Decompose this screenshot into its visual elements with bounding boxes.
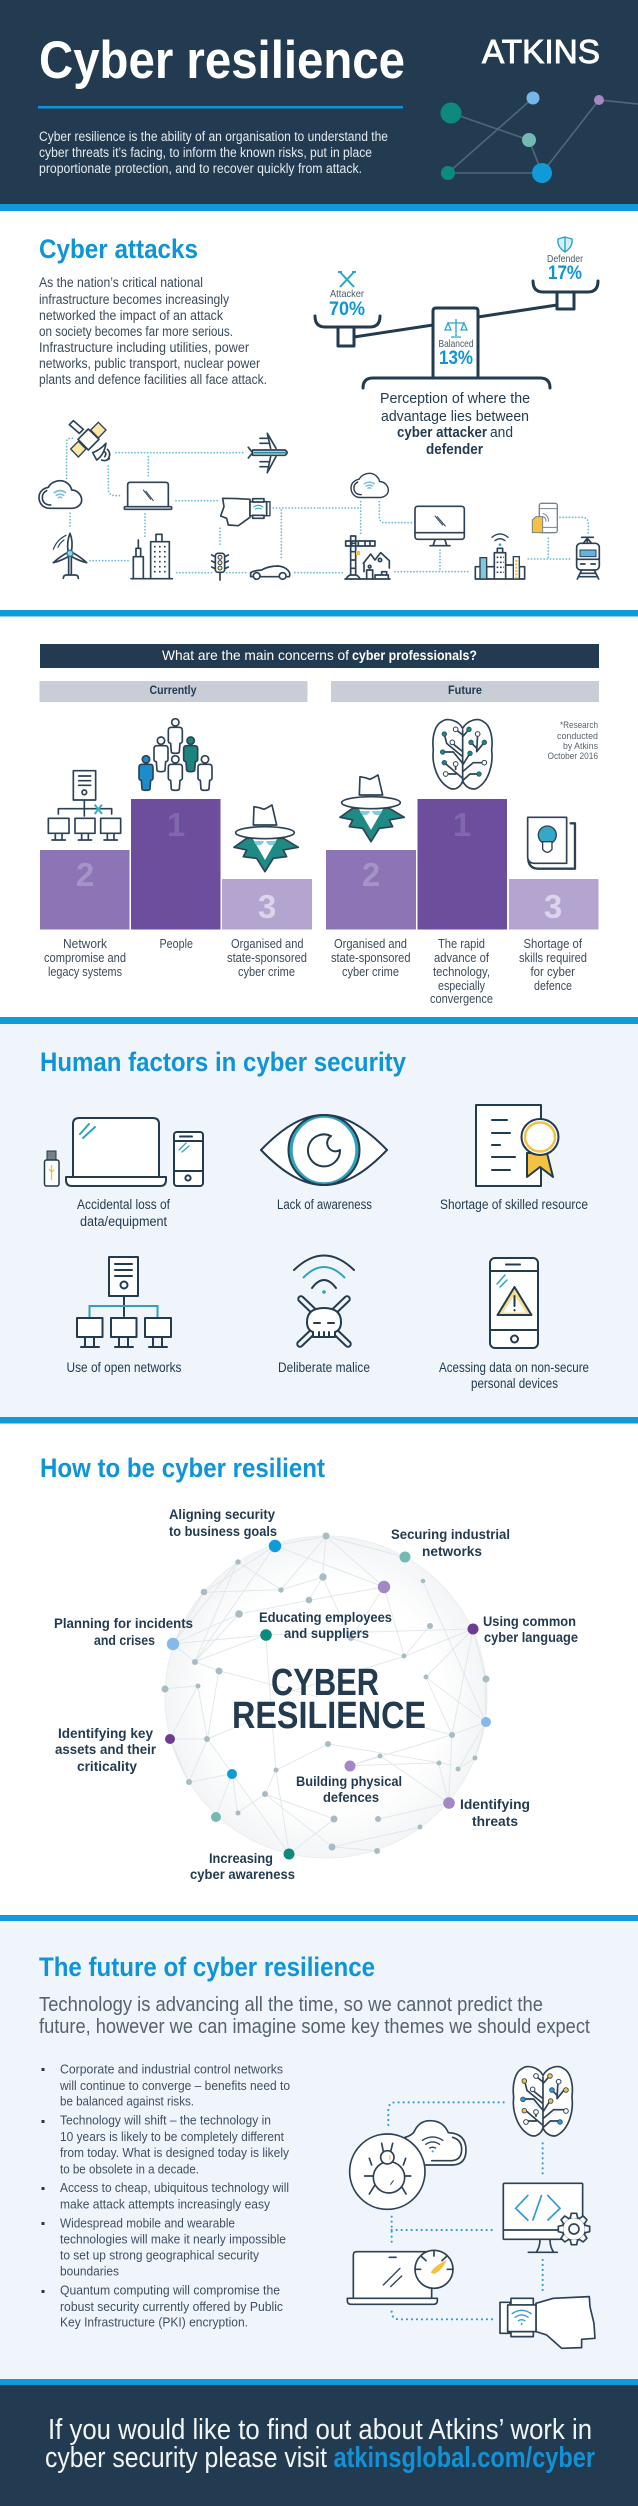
label xyxy=(439,1360,589,1391)
intro: future, however we can imagine some key themes we should expect xyxy=(39,2016,590,2038)
footer xyxy=(0,2379,638,2506)
bullet: shift: from today. What is designed today is likely xyxy=(60,2145,289,2160)
section divider band xyxy=(0,1417,638,1424)
icon: smartwatch on wrist xyxy=(500,2297,595,2348)
header panel xyxy=(0,0,638,211)
bar labels: future: state-sponsored xyxy=(331,951,411,965)
label: aligning security xyxy=(169,1507,277,1539)
label: securing industrial networks: Securing industrial xyxy=(391,1527,510,1542)
bullet: shift xyxy=(42,2113,289,2176)
value: balanced: 13% xyxy=(439,348,473,369)
label: common language: cyber language xyxy=(484,1630,578,1645)
body text: infrastructure becomes increasingly xyxy=(39,292,229,307)
heading: How to be cyber resilient xyxy=(40,1453,325,1483)
perception caption: and xyxy=(490,424,513,441)
label: Deliberate malice xyxy=(278,1360,370,1375)
icon: bug in circle xyxy=(350,2134,425,2209)
label: identifying threats xyxy=(460,1797,530,1829)
icon: usb, laptop, phone xyxy=(44,1118,203,1186)
label: educating employees: and suppliers xyxy=(284,1626,369,1641)
label: planning xyxy=(54,1616,193,1648)
body text: networks, public transport, nuclear power xyxy=(39,356,260,371)
label: common language: Using common xyxy=(483,1614,576,1629)
icon: open network xyxy=(77,1257,171,1347)
bullet: access: make attack attempts increasingly easy xyxy=(60,2196,270,2212)
label: defender: Defender xyxy=(547,253,583,265)
centre title: CYBER xyxy=(271,1662,379,1704)
label: physical defences: defences xyxy=(323,1790,379,1805)
bullet: quantum: Key Infrastructure (PKI) encryption. xyxy=(60,2315,248,2330)
banner heading xyxy=(40,644,599,668)
bar labels: future: cyber crime xyxy=(342,965,399,979)
icon: server network with break xyxy=(48,771,121,840)
label: Use of open networks xyxy=(66,1360,182,1375)
bullet: quantum xyxy=(42,2283,283,2330)
icon: car xyxy=(251,566,290,579)
bar labels: currently: cyber crime xyxy=(238,965,295,979)
perception caption: cyber attacker xyxy=(397,424,487,441)
bullet: quantum: robust security currently offered by Public xyxy=(60,2299,283,2314)
bar labels: future: especially xyxy=(438,979,486,993)
panel: human factors xyxy=(0,1024,638,1417)
intro text: cyber threats it’s facing, to inform the known risks, put in place xyxy=(39,145,372,160)
icon: swords xyxy=(338,272,356,287)
sphere network diagram xyxy=(162,1532,491,1860)
label: Shortage of skilled resource xyxy=(440,1197,588,1212)
network of connected infrastructure, right xyxy=(320,473,599,579)
label: aligning security: to business goals xyxy=(169,1524,277,1539)
bullet: shift: to be obsolete in a decade. xyxy=(60,2161,199,2176)
label: Accidental loss of xyxy=(77,1197,170,1212)
bar labels: future: convergence xyxy=(430,992,493,1006)
bullet: access xyxy=(42,2180,289,2212)
bar chart: future: 2 xyxy=(362,856,380,893)
bullet: wearables: to set up strong geographical security xyxy=(60,2248,259,2262)
label: cyber awareness: cyber awareness xyxy=(190,1867,295,1882)
label: physical defences: Building physical xyxy=(296,1774,402,1789)
bar chart: future: 3 xyxy=(544,888,562,925)
icon: eye xyxy=(261,1115,387,1185)
icon: brain xyxy=(513,2067,572,2136)
icon: smart city xyxy=(475,534,525,579)
icon: traffic light xyxy=(212,553,228,580)
icon: brain with circuits xyxy=(433,720,492,789)
research note: October 2016 xyxy=(548,751,598,762)
heading: Cyber attacks xyxy=(39,234,198,264)
banner heading: What are the main concerns of xyxy=(162,647,349,663)
bar labels: currently: People xyxy=(160,937,193,951)
perception caption: defender xyxy=(426,441,483,458)
centre title: RESILIENCE xyxy=(232,1695,426,1737)
icon: certificate with rosette xyxy=(476,1105,558,1186)
bar chart: currently: 3 xyxy=(258,888,276,925)
label: attacker: Attacker xyxy=(330,288,364,300)
body text: plants and defence facilities all face attack. xyxy=(39,372,267,387)
label: securing industrial networks: networks xyxy=(422,1544,482,1559)
bar labels: future: Organised and xyxy=(334,937,407,951)
bar labels: future: defence xyxy=(534,979,572,993)
bar labels: currently: state-sponsored xyxy=(227,951,307,965)
icon: people xyxy=(139,719,212,790)
body text: on society becomes far more serious. xyxy=(39,324,233,339)
bar labels: future: advance of xyxy=(434,951,489,965)
body text xyxy=(39,275,267,387)
bar labels: future: The rapid xyxy=(438,937,485,951)
label: cyber awareness: Increasing xyxy=(209,1851,273,1866)
bar labels: future: skills required xyxy=(519,951,587,965)
label: educating employees: Educating employees xyxy=(259,1610,392,1625)
intro text: Cyber resilience is the ability of an organisation to understand the xyxy=(39,129,388,144)
bullet: shift: 10 years is likely to be completely different xyxy=(60,2129,284,2144)
label: data/equipment xyxy=(80,1214,167,1229)
bullet: shift: Technology will shift – the technology in xyxy=(60,2113,271,2128)
banner heading: cyber professionals? xyxy=(352,647,477,663)
bar chart: currently: 2 xyxy=(76,856,94,893)
bullet: converge: be balanced against risks. xyxy=(60,2094,194,2109)
icon: scales xyxy=(445,319,467,337)
panel: how to be cyber resilient xyxy=(40,1453,578,1882)
column header: future xyxy=(331,681,599,702)
bar labels: future: for cyber xyxy=(530,965,575,979)
label: identifying threats: Identifying xyxy=(460,1797,530,1812)
icon: wind turbine xyxy=(53,533,87,578)
bullet: wearables: technologies will make it nearly impossible xyxy=(60,2231,286,2246)
icon: phone and SIM xyxy=(532,503,557,533)
bullet list xyxy=(42,2062,290,2330)
bar chart: currently xyxy=(40,799,312,930)
label: identifying key assets: assets and their xyxy=(55,1742,157,1757)
label: planning: and crises xyxy=(94,1633,155,1648)
label: personal devices xyxy=(471,1376,558,1391)
bullet: access: Access to cheap, ubiquitous technology will xyxy=(60,2180,289,2195)
perception caption: advantage lies between xyxy=(381,408,529,425)
body text: networked the impact of an attack xyxy=(39,308,223,323)
column header: currently xyxy=(40,681,308,702)
perception caption xyxy=(380,390,530,458)
icon: skull with wifi xyxy=(294,1256,354,1344)
label: planning: Planning for incidents xyxy=(54,1616,193,1631)
bullet: converge xyxy=(42,2062,290,2109)
label: Lack of awareness xyxy=(277,1197,372,1212)
panel: concerns of cyber professionals xyxy=(40,644,599,1006)
label: common language xyxy=(483,1614,578,1645)
section divider band xyxy=(0,1915,638,1921)
label: educating employees xyxy=(259,1610,392,1641)
perception caption: Perception of where the xyxy=(380,390,530,407)
bullet: wearables xyxy=(42,2215,286,2279)
bullet: quantum: Quantum computing will compromise the xyxy=(60,2283,280,2298)
label: identifying threats: threats xyxy=(472,1814,518,1829)
research note: by Atkins xyxy=(563,741,598,752)
bullet: wearables: boundaries xyxy=(60,2264,119,2279)
bullet: converge: Corporate and industrial control networks xyxy=(60,2062,283,2076)
bar labels: future: technology, xyxy=(433,965,490,979)
label xyxy=(77,1197,170,1229)
icon: book with lightbulb xyxy=(528,817,575,869)
network of connected infrastructure, left xyxy=(39,421,320,580)
call to action: cyber security please visit xyxy=(45,2442,327,2474)
body text: As the nation’s critical national xyxy=(39,275,203,290)
research note: conducted xyxy=(557,731,598,742)
label: Acessing data on non-secure xyxy=(439,1360,589,1375)
label: identifying key assets: Identifying key xyxy=(58,1726,153,1741)
label: identifying key assets: criticality xyxy=(77,1759,137,1774)
label: identifying key assets xyxy=(55,1726,157,1774)
bar labels: currently: compromise and xyxy=(44,951,126,965)
logo: Atkins: ATKINS xyxy=(482,33,600,70)
heading: Human factors in cyber security xyxy=(40,1047,406,1077)
icon: buildings xyxy=(131,534,172,579)
bullet: converge: will continue to converge – benefits need to xyxy=(59,2078,290,2093)
balance scale chart xyxy=(315,237,598,388)
label: aligning security: Aligning security xyxy=(169,1507,275,1522)
section divider band xyxy=(0,1017,638,1024)
call to action xyxy=(45,2414,595,2474)
bar labels: currently: Network xyxy=(63,937,108,951)
bar chart: future xyxy=(326,799,598,930)
icon: smartwatch hand xyxy=(221,498,270,526)
future technology icon network xyxy=(347,2067,595,2348)
icon: shield xyxy=(558,237,572,252)
body text: Infrastructure including utilities, power xyxy=(39,340,249,355)
intro xyxy=(39,1994,590,2038)
section divider band xyxy=(0,610,638,616)
icon: hacker (future) xyxy=(340,775,404,842)
icon: hacker (currently) xyxy=(234,805,298,872)
intro: Technology is advancing all the time, so we cannot predict the xyxy=(39,1994,543,2016)
icon: train xyxy=(577,537,599,579)
icon: laptop with speed gauge xyxy=(347,2250,453,2304)
icon: plane xyxy=(248,433,287,473)
research note: *Research xyxy=(560,720,598,731)
bar chart: future: 1 xyxy=(453,806,471,843)
network decoration xyxy=(440,92,638,183)
centre title xyxy=(232,1662,426,1737)
heading: The future of cyber resilience xyxy=(39,1952,375,1982)
value: defender: 17% xyxy=(548,263,582,284)
label: securing industrial networks xyxy=(391,1527,510,1559)
bar labels: currently: legacy systems xyxy=(48,965,122,979)
label: cyber awareness xyxy=(190,1851,295,1882)
icon: monitor with code xyxy=(503,2183,590,2252)
label: balanced: Balanced xyxy=(438,338,474,350)
bar labels: currently xyxy=(44,937,307,979)
label: physical defences xyxy=(296,1774,402,1805)
bar labels: future: Shortage of xyxy=(524,937,582,951)
icon: monitor xyxy=(415,506,464,546)
bar chart: currently: 1 xyxy=(167,806,185,843)
bullet: wearables: Widespread mobile and wearable xyxy=(60,2215,235,2230)
icon: satellite xyxy=(69,421,110,461)
panel: cyber attacks xyxy=(0,211,638,610)
icon: cloud with wifi xyxy=(405,2121,466,2165)
panel: the future of cyber resilience xyxy=(0,1921,638,2379)
icon: crane and houses xyxy=(345,536,390,579)
icon: cloud xyxy=(39,481,82,508)
icon: cloud xyxy=(351,473,388,498)
intro text: proportionate protection, and to recover quickly from attack. xyxy=(39,161,362,176)
column header: currently: Currently xyxy=(150,683,197,697)
icon: phone warning xyxy=(490,1258,538,1348)
value: attacker: 70% xyxy=(329,299,365,320)
intro text xyxy=(39,129,388,176)
column header: future: Future xyxy=(448,683,482,697)
title: Cyber resilience xyxy=(39,31,405,90)
research note xyxy=(548,720,598,762)
icon: laptop xyxy=(124,482,172,509)
bar labels: future xyxy=(331,937,587,1006)
bar labels: currently: Organised and xyxy=(231,937,304,951)
